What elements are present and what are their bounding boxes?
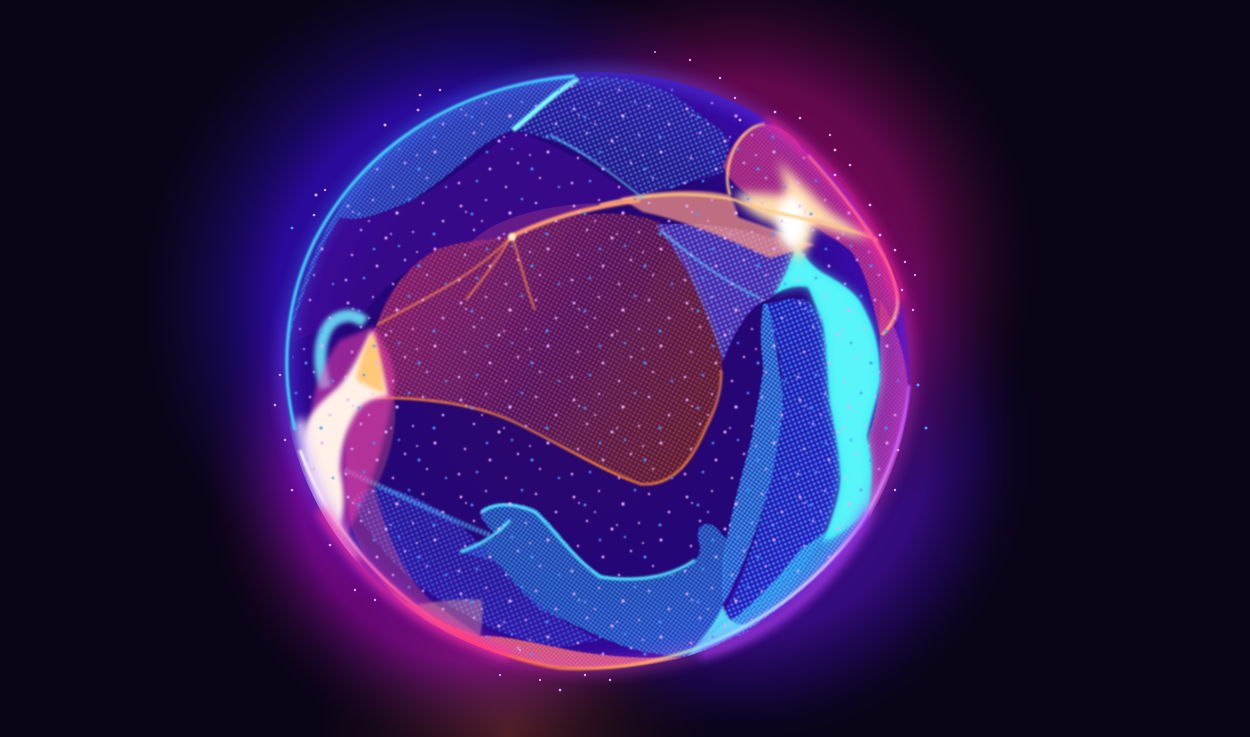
mesh: vertical cyan ribbon	[722, 303, 783, 605]
rim: bright blue left arc	[287, 76, 575, 430]
illustration: glowing particle sphere	[156, 0, 1019, 737]
sphere body	[285, 72, 909, 668]
mesh: lower right cyan veil	[687, 470, 885, 657]
mesh: top left cyan band	[287, 76, 575, 345]
glow: left pink sheet	[309, 327, 395, 540]
glow: cyan right flare	[773, 245, 880, 543]
glow: lower blue flare	[460, 505, 695, 579]
mesh: right dotted panel	[720, 298, 840, 640]
glow: bottom cyan peak	[686, 604, 752, 656]
rim: upper right pink bloom	[765, 120, 900, 300]
mesh: upper left faint veil	[287, 132, 640, 345]
rim: lower right bloom	[700, 510, 870, 655]
particles: scattered sparks outside sphere	[274, 51, 928, 691]
glow: white core bloom	[777, 196, 807, 248]
glow: flare bloom along rim	[300, 420, 355, 560]
mesh: lower left dotted veil	[350, 488, 600, 648]
mesh: bottom orange arc	[380, 580, 687, 669]
mesh: peach bottom patch	[417, 599, 482, 637]
glow: flare yellow tip	[356, 332, 384, 394]
particles: interior sparks	[292, 78, 902, 662]
sphere contents	[287, 76, 908, 669]
mesh: blue wedge under the fold	[655, 224, 803, 362]
mesh: top dotted blue band	[513, 77, 730, 195]
rim: lower pink bloom	[320, 510, 510, 655]
mesh: top right peach loop	[723, 124, 900, 335]
glow: peach fold sheet	[620, 191, 815, 258]
mesh: faint veil above orange sheet	[465, 203, 600, 250]
glow: orange lower edge	[357, 370, 721, 484]
mesh: central orange sheet	[356, 213, 722, 485]
glow: cyan right flare bloom	[773, 245, 880, 543]
glow: diagonal ribbon edge	[550, 135, 760, 298]
glow: peach ridges	[600, 124, 897, 335]
glow: top cyan streak	[513, 79, 578, 130]
mesh: peach vertical veil	[346, 393, 480, 636]
glow: central ridge	[512, 200, 640, 236]
glow: white star core	[735, 160, 880, 262]
rim: bright bottom arc	[300, 385, 909, 669]
mesh: thin blue streak toward flare	[345, 470, 490, 535]
mesh: right rim peach band	[868, 300, 908, 525]
glow: left white flare	[304, 330, 388, 530]
glow: hot spark	[508, 233, 516, 241]
glow: orange lines in central sheet	[377, 236, 535, 325]
mesh: bottom blue ribbon	[460, 503, 727, 657]
glow: left cyan loop	[320, 316, 365, 388]
rim: soft glow	[286, 73, 908, 667]
